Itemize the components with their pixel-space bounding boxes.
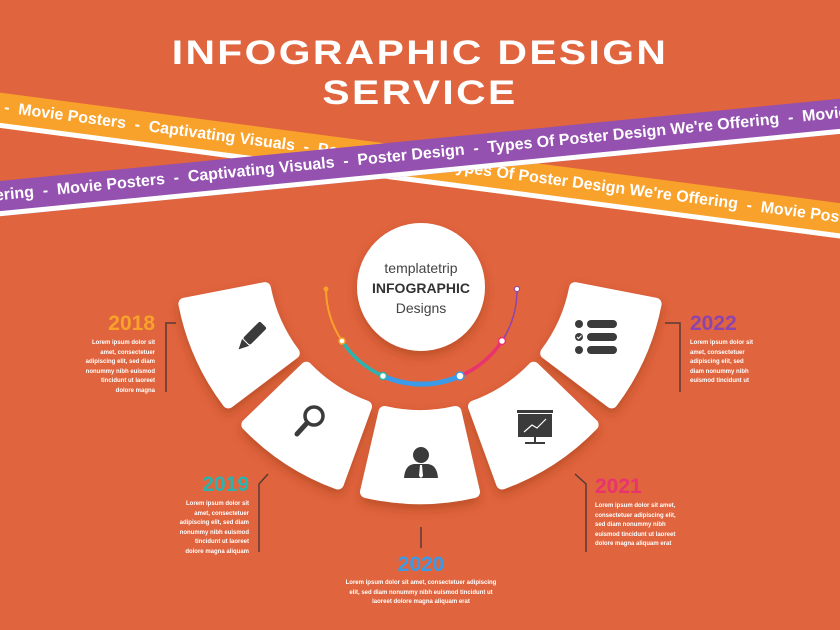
- tile: 2018: [184, 288, 294, 402]
- text: 2019: Lorem ipsum dolor sit amet, consectetuer adipiscing elit, sed diam nonummy nibh euismod tincidunt ut laoreet dolore magna aliquam: [180, 501, 249, 555]
- tile: 2020: [366, 412, 474, 498]
- icon: person: [404, 447, 438, 478]
- text: 2019: [180, 473, 249, 555]
- center circle: Designs: [396, 300, 446, 316]
- tile: 2022: [546, 288, 656, 402]
- text: 2020: Lorem ipsum dolor sit amet, consectetuer adipiscing elit, sed diam nonummy nibh euismod tincidunt ut laoreet dolore magna aliquam erat: [346, 580, 496, 605]
- text: 2020: 2020: [398, 553, 444, 576]
- text: 2020: [346, 553, 496, 605]
- title: INFOGRAPHIC DESIGN: [172, 34, 668, 72]
- text: 2022: [690, 312, 753, 384]
- tile: 2021: [474, 368, 593, 484]
- timeline arc: [324, 286, 520, 384]
- title: SERVICE: [322, 74, 518, 112]
- text: 2021: Lorem ipsum dolor sit amet, consectetuer adipiscing elit, sed diam nonummy nibh euismod tincidunt ut laoreet dolore magna aliquam erat: [595, 503, 676, 547]
- center circle: templatetrip: [384, 260, 458, 276]
- text: 2022: Lorem ipsum dolor sit amet, consectetuer adipiscing elit, sed diam nonummy nibh euismod tincidunt ut: [690, 340, 753, 384]
- text: 2021: 2021: [595, 475, 642, 498]
- center circle: [357, 223, 485, 351]
- title: [172, 34, 668, 112]
- text: 2019: 2019: [202, 473, 249, 496]
- text: 2018: [86, 312, 155, 394]
- tile: 2019: [247, 368, 366, 484]
- text: 2018: Lorem ipsum dolor sit amet, consectetuer adipiscing elit, sed diam nonummy nibh euismod tincidunt ut laoreet dolore magna: [86, 340, 155, 394]
- text: 2018: 2018: [108, 312, 155, 335]
- icon: magnifier: [297, 407, 323, 434]
- connector lines: [166, 323, 680, 552]
- icon: pencil: [235, 321, 267, 353]
- text: 2022: 2022: [690, 312, 737, 335]
- text: 2021: [595, 475, 676, 547]
- center circle: INFOGRAPHIC: [372, 280, 470, 296]
- icon: chart board: [517, 410, 553, 444]
- icon: list: [575, 320, 617, 354]
